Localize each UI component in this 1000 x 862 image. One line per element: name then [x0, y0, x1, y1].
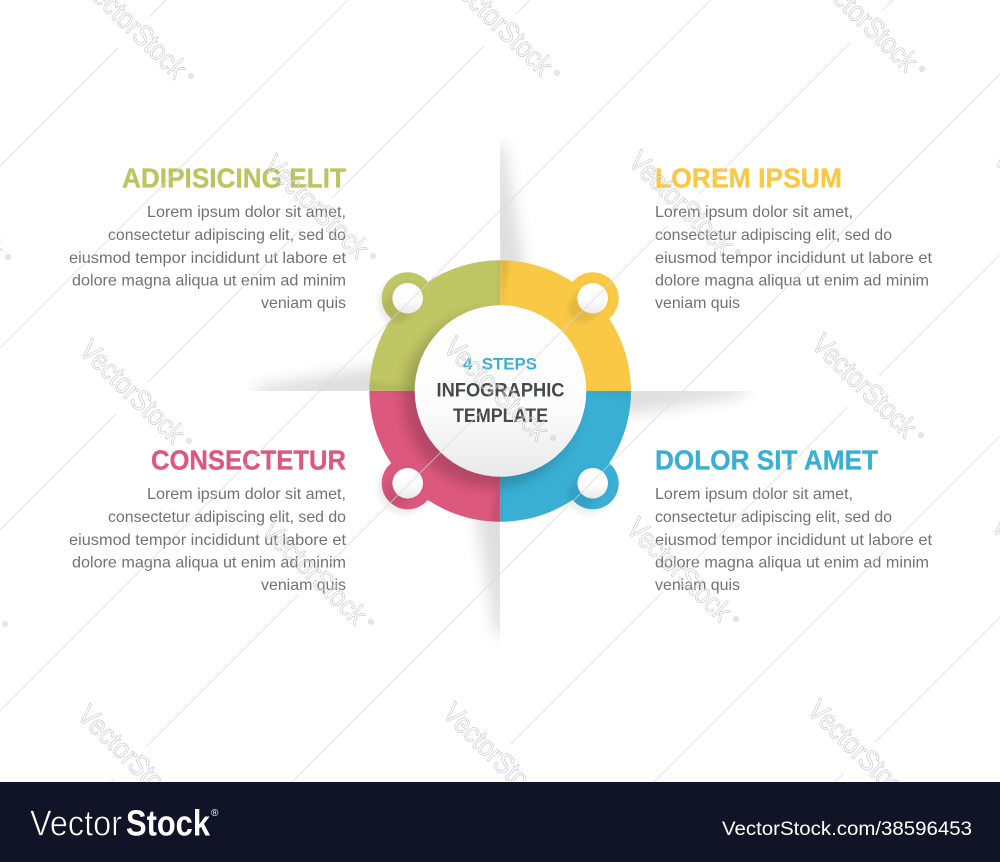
panel: adipisicing elit — [69, 163, 347, 312]
panel: lorem ipsum: consectetur adipiscing elit, sed do — [655, 227, 892, 244]
center heading: 4 STEPS — [463, 354, 537, 374]
panel: consectetur: dolore magna aliqua ut enim ad minim — [72, 555, 346, 572]
text: VectorStock — [436, 697, 554, 814]
text: VectorStock — [437, 331, 555, 448]
panel: lorem ipsum — [655, 163, 933, 312]
shadows on the ring — [365, 255, 636, 527]
panel: adipisicing elit: Lorem ipsum dolor sit amet, — [147, 204, 346, 221]
panel: dolor sit amet — [655, 444, 933, 594]
panel: adipisicing elit: ADIPISICING ELIT — [122, 163, 346, 194]
segment: pink — [369, 391, 500, 522]
panel: consectetur: CONSECTETUR — [151, 444, 346, 476]
logo: Vector — [30, 803, 122, 844]
text: VectorStock — [73, 334, 191, 451]
center heading: TEMPLATE — [453, 405, 548, 427]
panel: lorem ipsum: eiusmod tempor incididunt ut labore et — [655, 250, 933, 267]
segment: blue — [500, 391, 631, 522]
logo: Stock — [126, 803, 211, 844]
panel: adipisicing elit: consectetur adipiscing elit, sed do — [108, 227, 346, 244]
segment: green — [369, 260, 500, 391]
panel: lorem ipsum: veniam quis — [655, 295, 740, 312]
panel: consectetur: eiusmod tempor incididunt ut labore et — [69, 532, 347, 549]
logo: ® — [211, 808, 219, 819]
text: VectorStock — [801, 694, 919, 811]
center heading — [436, 354, 564, 427]
text: VectorStock — [257, 149, 375, 266]
panel: consectetur — [69, 444, 347, 594]
panel: adipisicing elit: eiusmod tempor incididunt ut labore et — [69, 250, 347, 267]
panel: dolor sit amet: DOLOR SIT AMET — [655, 444, 878, 476]
panel: dolor sit amet: Lorem ipsum dolor sit amet, — [655, 486, 853, 503]
image id: VectorStock.com/38596453 — [722, 818, 972, 840]
panel: adipisicing elit: veniam quis — [261, 295, 346, 312]
knob page shadows — [378, 277, 615, 514]
center heading: INFOGRAPHIC — [436, 380, 564, 402]
center circle — [415, 305, 586, 477]
panel: lorem ipsum: LOREM IPSUM — [655, 163, 842, 194]
text: VectorStock — [255, 515, 373, 632]
panel: dolor sit amet: dolore magna aliqua ut enim ad minim — [655, 555, 929, 572]
knob circles — [392, 283, 608, 499]
panel: adipisicing elit: dolore magna aliqua ut enim ad minim — [72, 273, 346, 290]
panel: lorem ipsum: dolore magna aliqua ut enim ad minim — [655, 273, 929, 290]
text: VectorStock — [71, 699, 189, 816]
panel: lorem ipsum: Lorem ipsum dolor sit amet, — [655, 204, 853, 221]
text: VectorStock — [622, 145, 740, 262]
segment: yellow — [500, 260, 631, 391]
footer banner — [0, 782, 1000, 862]
panel: dolor sit amet: consectetur adipiscing elit, sed do — [655, 509, 892, 526]
fold shadows behind the diagram — [255, 145, 745, 635]
text: VectorStock — [805, 328, 923, 445]
panel: consectetur: consectetur adipiscing elit, sed do — [108, 509, 346, 526]
panel: dolor sit amet: veniam quis — [655, 577, 740, 594]
panel: consectetur: veniam quis — [261, 577, 346, 594]
panel: consectetur: Lorem ipsum dolor sit amet, — [147, 486, 346, 503]
logo — [30, 803, 219, 844]
panel: dolor sit amet: eiusmod tempor incididunt ut labore et — [655, 532, 933, 549]
text: VectorStock — [620, 512, 738, 629]
circular four-step diagram — [365, 255, 636, 527]
